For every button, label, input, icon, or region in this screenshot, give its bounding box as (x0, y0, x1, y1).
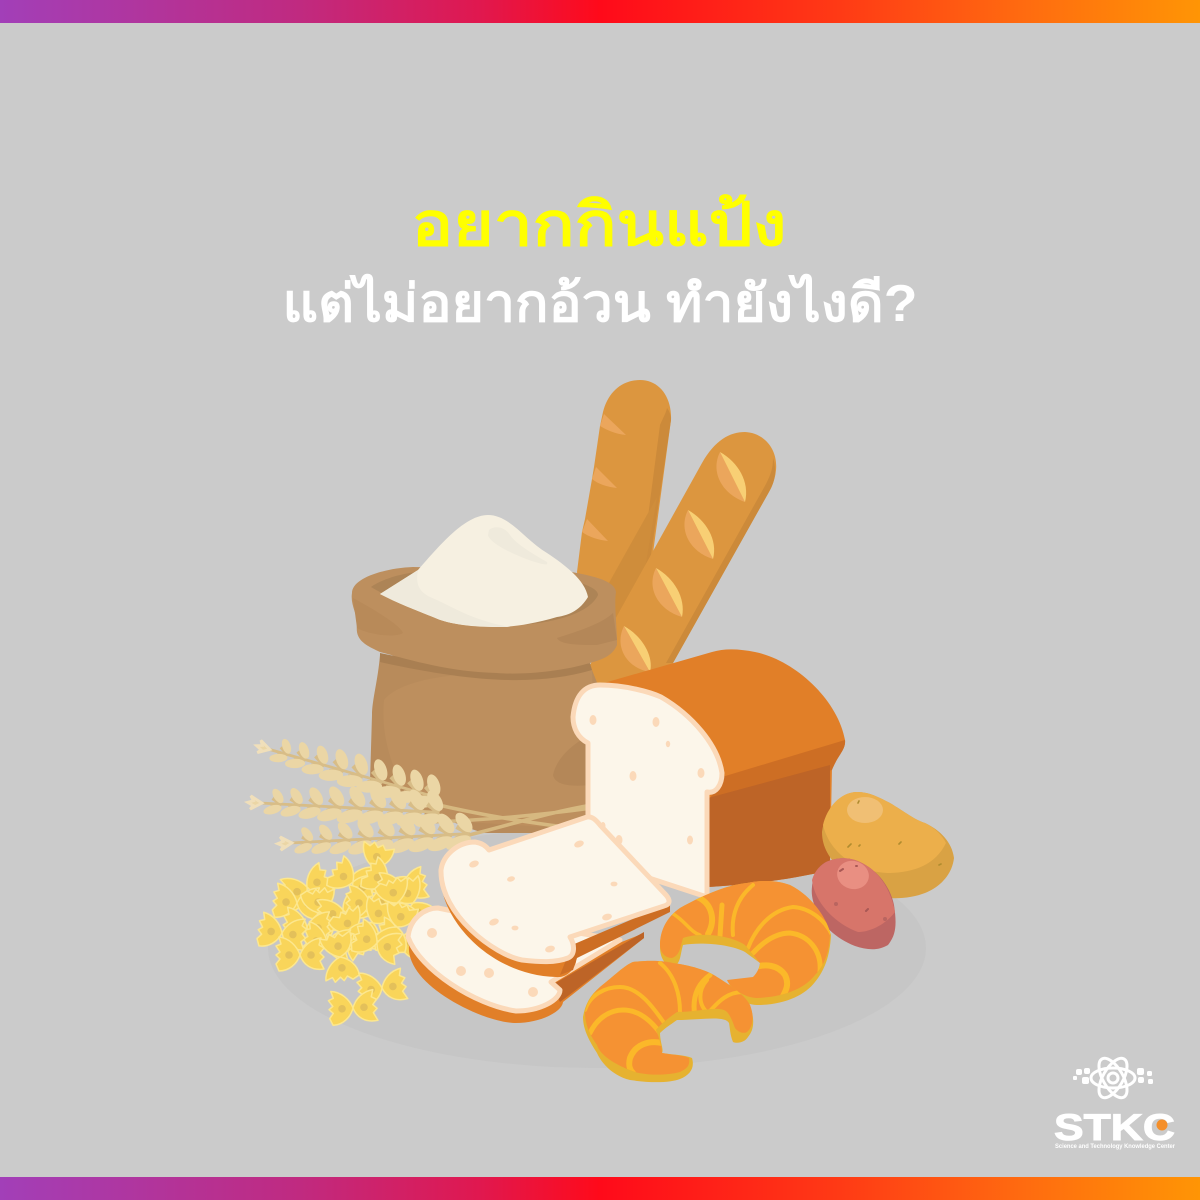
front baguette (590, 432, 776, 700)
sack body (370, 655, 600, 833)
title (282, 191, 917, 333)
flour sack (352, 515, 617, 833)
wheat ear top (252, 723, 448, 816)
sack rim (352, 567, 617, 674)
bottom gradient bar (0, 1177, 1200, 1200)
heading line 1: อยากกินแป้ง (412, 191, 786, 258)
logo orange dot (1156, 1120, 1168, 1130)
loaf slice face (573, 685, 722, 897)
bread slice middle (441, 817, 670, 977)
lower croissant (583, 961, 753, 1082)
wheat ear bottom (276, 809, 477, 862)
heading line 2: แต่ไม่อยากอ้วน ทำยังไงดี? (282, 273, 917, 333)
infographic canvas (244, 194, 1175, 1150)
wheat ear middle (247, 778, 447, 831)
logo wordmark: STKC (1054, 1107, 1175, 1148)
plate shadow (268, 828, 926, 1068)
top gradient bar (0, 0, 1200, 23)
bread slice bottom (408, 908, 644, 1023)
yellow potato (822, 792, 954, 898)
atom icon (1091, 1054, 1135, 1102)
loaf crust (597, 649, 845, 887)
flour pile (380, 515, 588, 627)
STKC logo (1054, 1054, 1176, 1150)
back baguette (577, 380, 671, 680)
red potato (812, 857, 896, 949)
upper croissant (660, 881, 832, 1005)
logo tagline: Science and Technology Knowledge Center (1055, 1144, 1176, 1150)
bread loaf (573, 649, 845, 897)
farfalle pasta (256, 838, 441, 1026)
logo dots (1073, 1068, 1153, 1084)
wheat stalks (247, 723, 592, 862)
